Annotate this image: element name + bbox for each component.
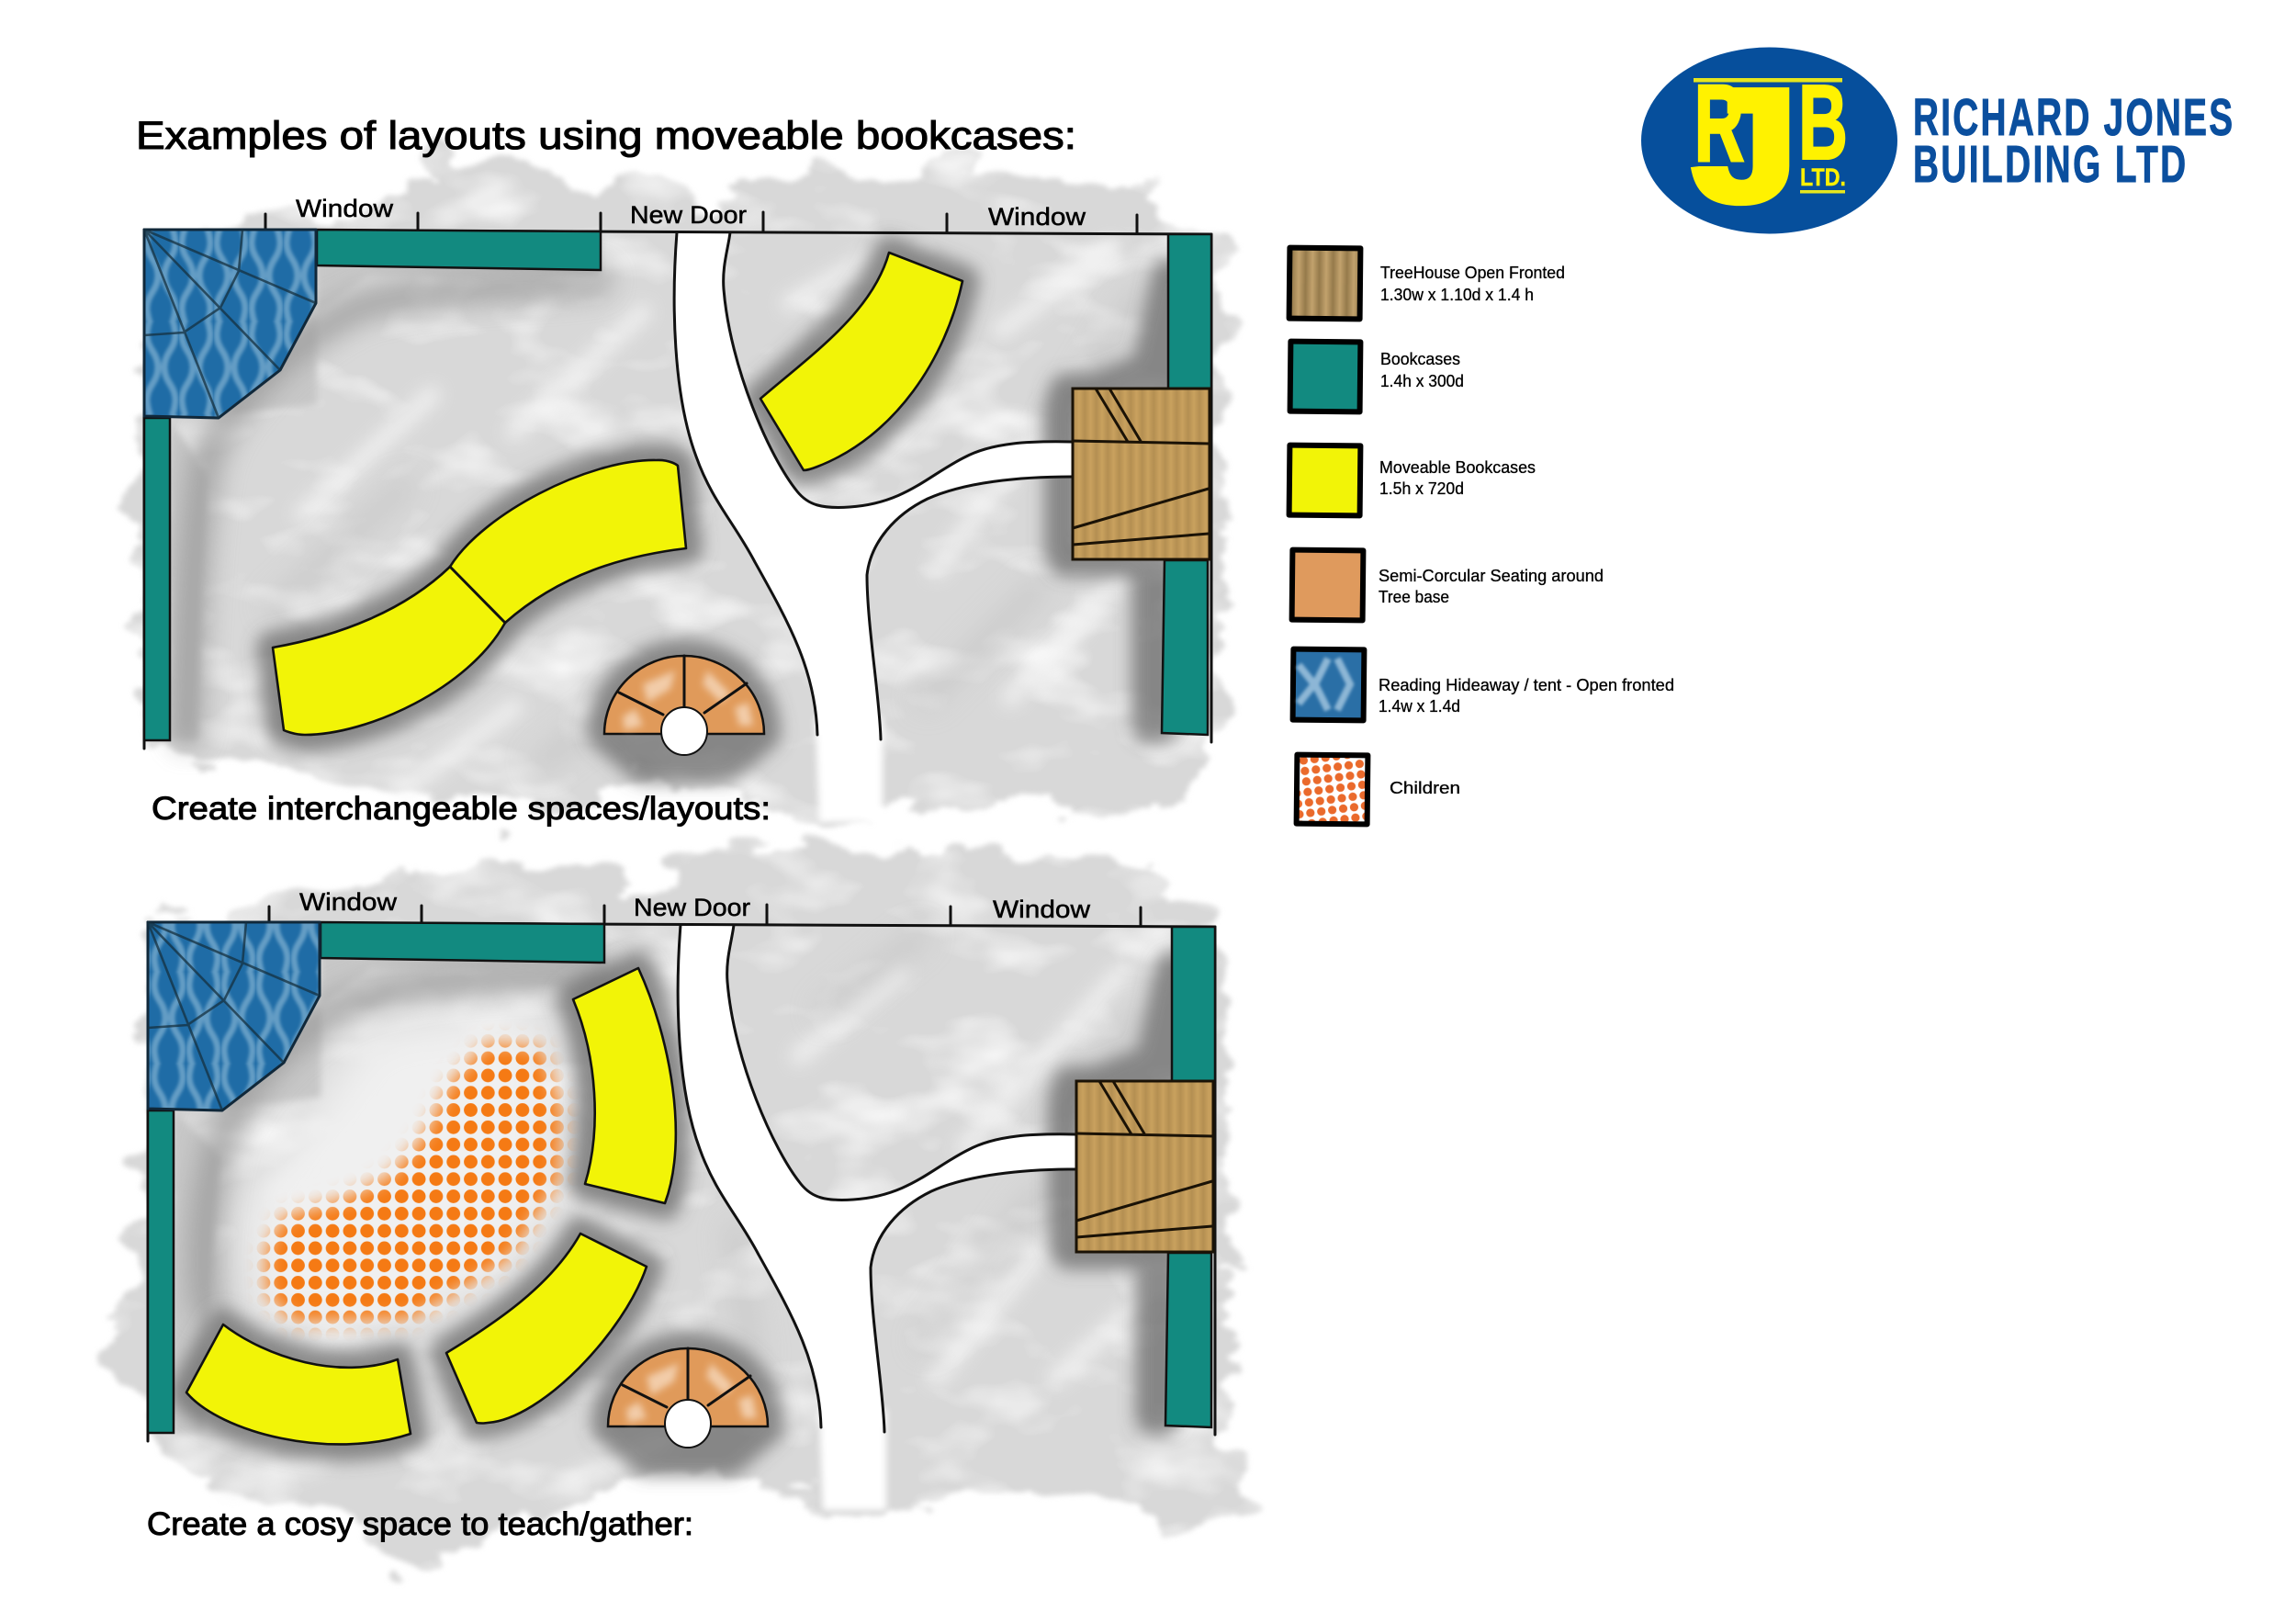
wall outline with window ticks [148,905,1215,1441]
legend text: treehouse: TreeHouse Open Fronted [1380,263,1565,282]
label: Window left: Window [299,888,398,916]
wall outline with window ticks [144,212,1211,749]
legend text: moveable bookcases: 1.5h x 720d [1379,479,1464,498]
label: New Door: New Door [634,894,750,921]
legend swatch: bookcases [1290,342,1360,411]
legend swatch: reading hideaway [1293,649,1364,720]
logo letters [1690,58,1848,234]
treehouse [1073,389,1210,559]
legend text: treehouse: 1.30w x 1.10d x 1.4 h [1380,285,1534,304]
legend text: seating: Semi-Corcular Seating around [1379,566,1604,585]
legend swatch: treehouse [1289,248,1360,319]
background: watercolour grey wash [110,156,1251,1561]
label: Window right: Window [993,896,1091,923]
legend swatch: seating [1292,550,1363,620]
logo letters: B [1798,62,1848,182]
bookcases: fixed teal [144,230,1211,740]
label: Window left: Window [296,195,394,222]
title: Examples of layouts using moveable bookcases: [136,114,1076,158]
semi-circular seating with tree [604,656,764,755]
company name: BUILDING LTD [1913,136,2186,194]
moveable bookcase: middle [446,1234,647,1424]
reading hideaway tent [148,922,320,1110]
shadows around furniture, plan 1 [170,235,1168,767]
heading: interchangeable layouts: Create interchangeable spaces/layouts: [152,791,771,827]
door and path [674,232,1072,822]
semi-circular seating with tree [608,1348,768,1448]
logo ellipse [1641,48,1897,233]
reading hideaway tent [144,230,316,418]
legend swatch: moveable bookcases [1289,445,1360,515]
bookcases: fixed teal [148,922,1215,1433]
floor plan 1: interchangeable layout [144,195,1211,822]
legend text: seating: Tree base [1379,587,1449,606]
floor plan 2: cosy space [148,888,1215,1510]
legend swatch: children [1297,755,1367,824]
moveable bookcase: lower left [186,1324,411,1444]
moveable bookcases: joined pair [273,460,686,735]
label: Window right: Window [988,203,1086,231]
heading: cosy space: Create a cosy space to teach/gather: [147,1506,693,1542]
legend text: moveable bookcases: Moveable Bookcases [1379,457,1536,477]
door and path [678,925,1075,1510]
moveable bookcase: upper right [760,253,962,470]
moveable bookcase: upper [573,968,676,1203]
logo: RJB Ltd [1641,48,2233,234]
logo letters: R [1694,63,1744,185]
legend text: bookcases: Bookcases [1380,349,1460,368]
treehouse [1076,1081,1213,1252]
logo letters: J [1694,58,1797,234]
shadows around furniture, plan 2 [174,928,1172,1460]
company name: RICHARD JONES [1913,89,2233,147]
legend text: reading hideaway: Reading Hideaway / tent - Open fronted [1379,675,1674,694]
children area: orange dots [252,1029,576,1337]
legend text: children: Children [1390,778,1460,797]
label: New Door: New Door [630,201,747,229]
company name [1913,89,2233,194]
legend text: bookcases: 1.4h x 300d [1380,371,1464,390]
legend [1289,248,1674,824]
legend text: reading hideaway: 1.4w x 1.4d [1379,696,1460,716]
logo letters: LTD. [1800,163,1846,191]
